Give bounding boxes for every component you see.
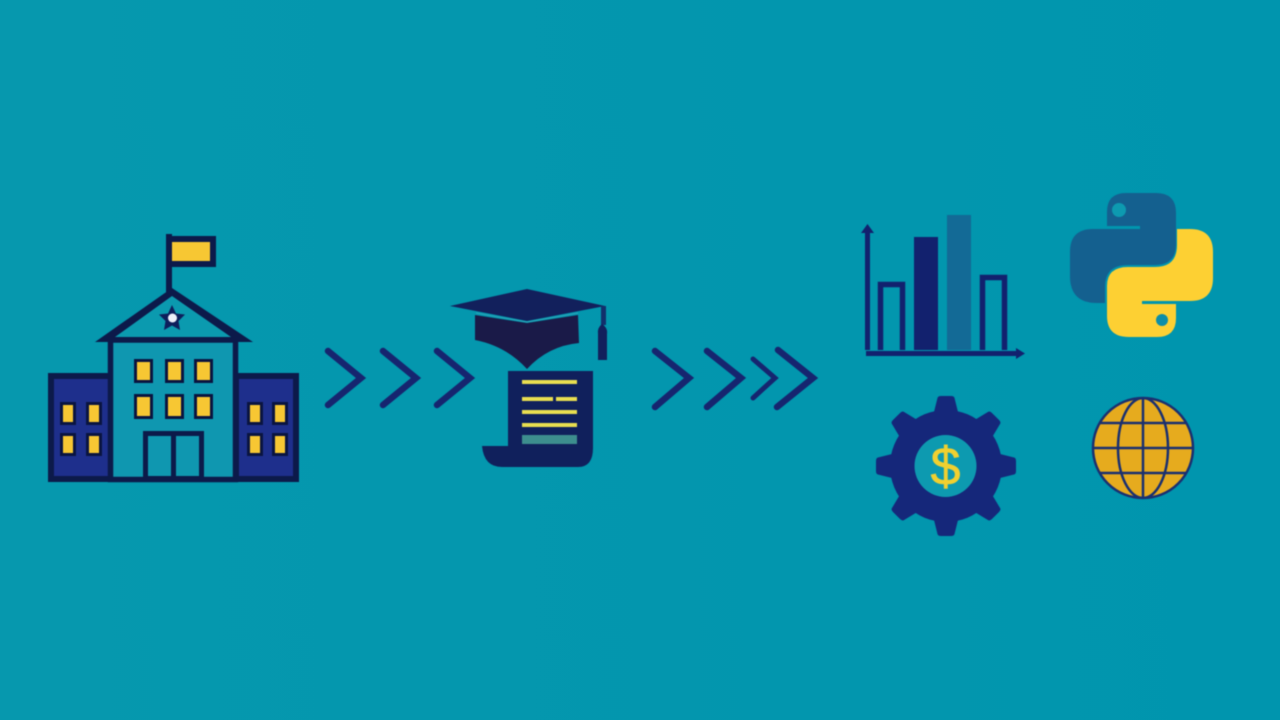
icon: graduation cap and diploma — [450, 289, 607, 467]
main hall — [110, 340, 236, 480]
icon: gear with dollar — [876, 396, 1016, 536]
diploma scroll — [482, 371, 593, 467]
icon: globe — [1090, 398, 1196, 498]
bar 2 — [914, 237, 938, 350]
icon: python logo — [1070, 193, 1213, 337]
left wing — [51, 376, 111, 479]
cap — [450, 289, 607, 369]
icon: bar chart — [861, 215, 1025, 359]
bar 1 — [880, 284, 902, 350]
arrows: first chevron group — [328, 351, 470, 405]
door — [146, 433, 202, 478]
arrows: second chevron group — [655, 350, 813, 407]
gear body — [876, 396, 1016, 536]
y axis — [861, 224, 874, 350]
roof — [95, 288, 253, 342]
gear hub — [914, 435, 976, 497]
dollar sign: $ — [930, 437, 961, 497]
blue snake eye — [1112, 203, 1126, 217]
icon: school building — [51, 234, 296, 480]
bar 4 — [982, 278, 1004, 350]
bar 3 — [947, 215, 971, 350]
yellow snake — [1107, 229, 1213, 337]
blue snake — [1070, 193, 1176, 303]
right wing — [236, 376, 296, 479]
infographic canvas — [47, 192, 1214, 537]
yellow snake eye — [1156, 314, 1168, 326]
x axis — [866, 348, 1025, 359]
flag — [166, 234, 213, 292]
star — [159, 305, 185, 330]
